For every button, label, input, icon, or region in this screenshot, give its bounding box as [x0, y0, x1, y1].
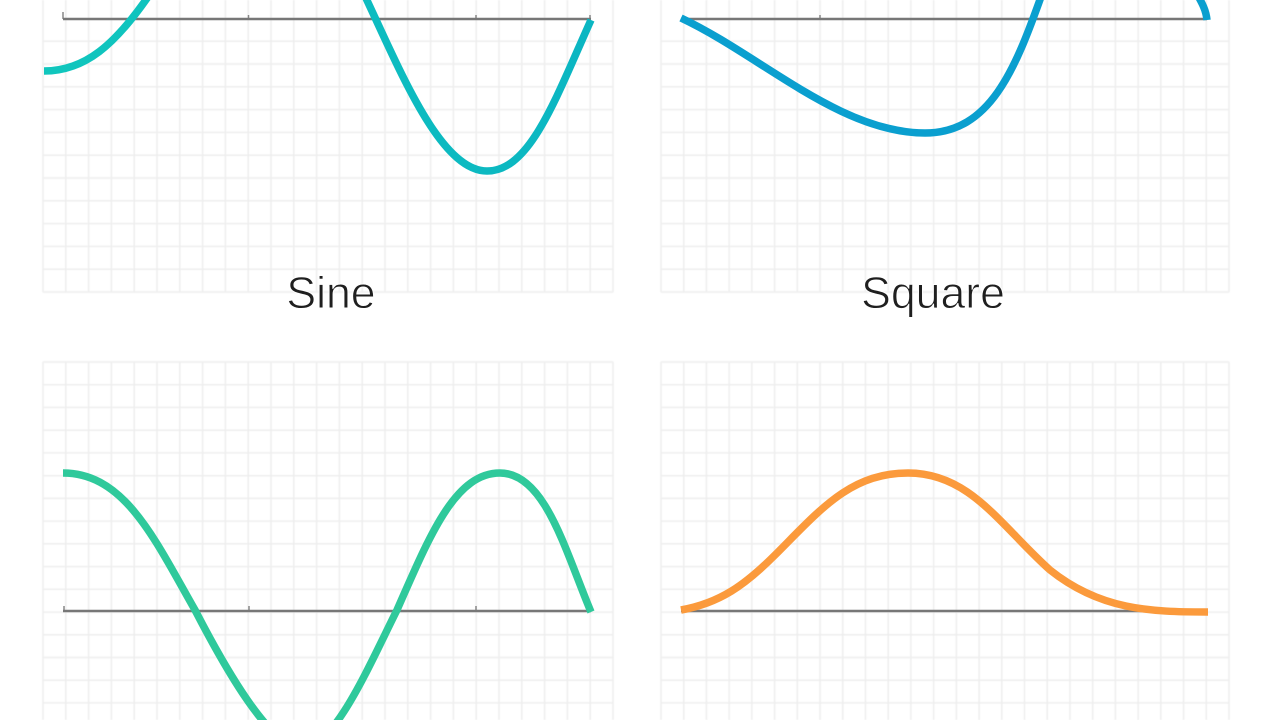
label: Sine: Sine: [286, 269, 376, 318]
curve: orange pulse: [681, 473, 1208, 612]
label: Square: Square: [861, 269, 1005, 318]
panel: triangle chart: [43, 362, 613, 720]
panel: orange chart: [661, 362, 1229, 720]
panel: sine chart: [43, 0, 613, 292]
panel: square chart: [661, 0, 1229, 292]
curve: green wave: [63, 473, 591, 720]
curve: square wave approximation: [681, 0, 1207, 133]
curve: sine wave: [44, 0, 591, 171]
